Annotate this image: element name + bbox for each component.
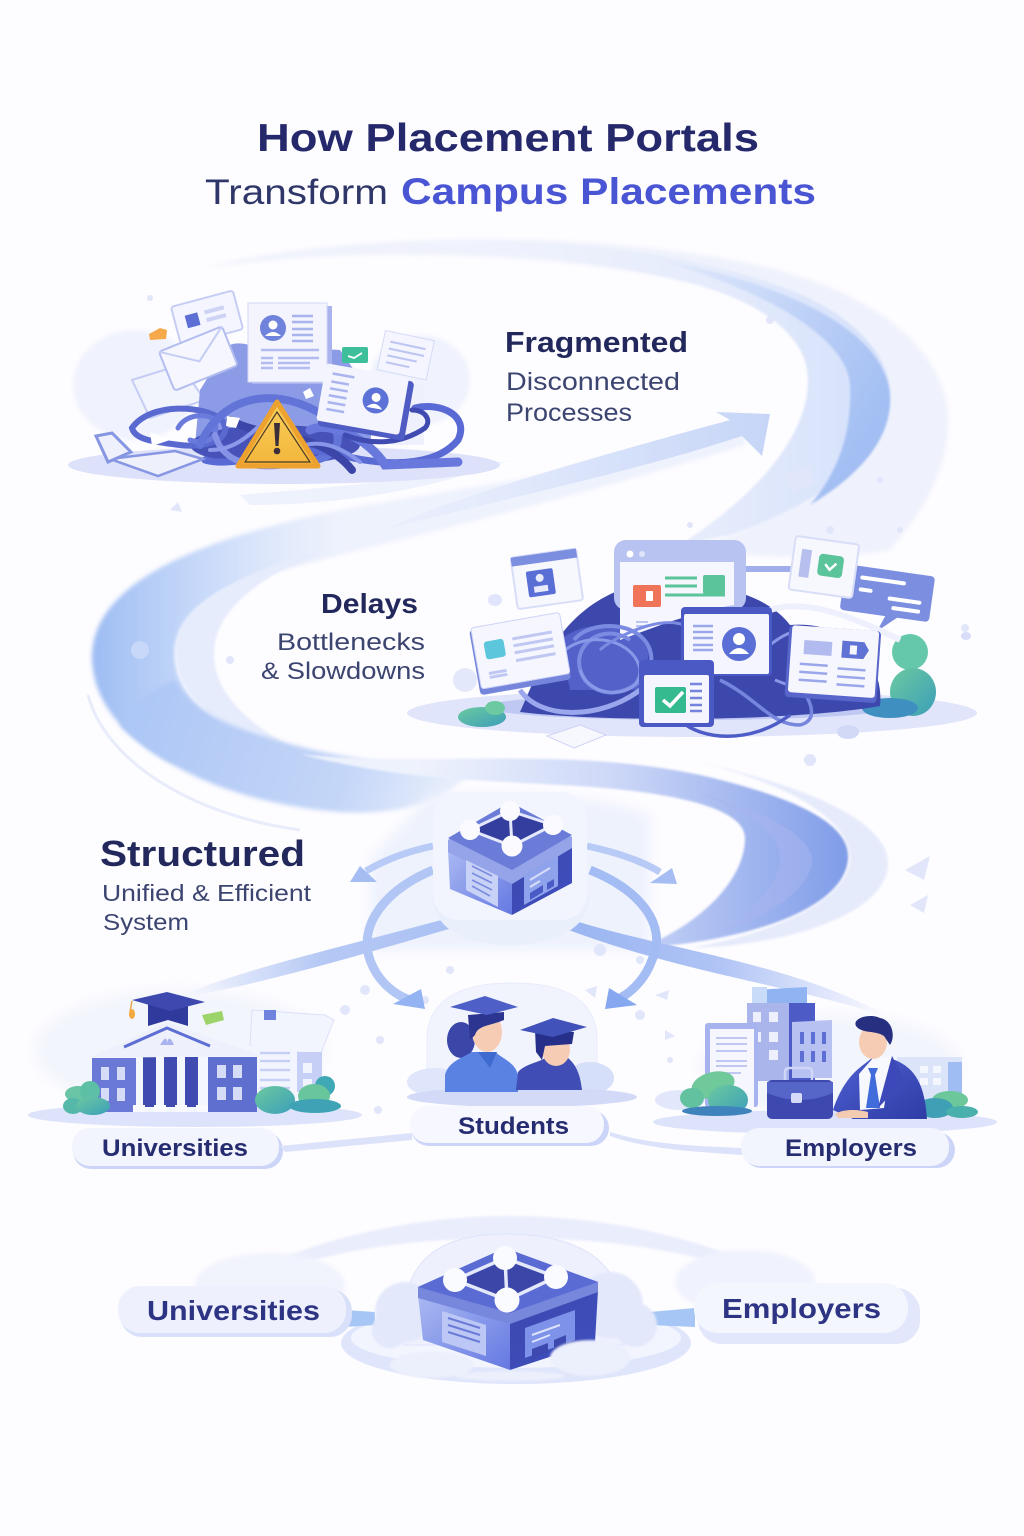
pill: universities	[118, 1286, 352, 1337]
dark pile	[520, 583, 880, 719]
platform	[341, 1302, 691, 1384]
student 2	[516, 1018, 587, 1090]
inbound band from universities	[170, 908, 483, 1000]
cloud left	[407, 1068, 463, 1096]
left paper	[132, 365, 205, 418]
glass panel	[433, 792, 587, 920]
arrow into upper right	[390, 412, 770, 528]
left windows	[101, 1067, 125, 1101]
pill: students: Students	[458, 1113, 569, 1140]
backdrop cloud	[35, 990, 325, 1110]
front clouds	[390, 1340, 630, 1381]
pill: universities: Universities	[147, 1295, 320, 1326]
right bushes	[255, 1076, 341, 1114]
top right card	[788, 536, 859, 598]
isometric box	[448, 801, 572, 915]
small paper	[547, 725, 606, 748]
right card with avatar	[315, 363, 415, 441]
bottom check card	[639, 660, 714, 727]
left cloud backdrop	[195, 1253, 345, 1317]
tangled cables	[132, 398, 461, 470]
right paper	[377, 330, 434, 380]
arrow left curve	[367, 870, 433, 1009]
left bushes	[63, 1081, 110, 1115]
arrow right curve	[590, 870, 657, 1009]
text: delays	[261, 588, 425, 685]
envelope	[159, 326, 238, 391]
description line 1: Bottlenecks	[277, 629, 425, 656]
right cloud backdrop	[675, 1250, 815, 1314]
graduation cap	[129, 992, 205, 1026]
ground	[407, 689, 977, 737]
orange tag	[149, 328, 167, 340]
connector: universities to students	[280, 1133, 412, 1152]
right card	[784, 625, 881, 703]
glass dome	[404, 1234, 624, 1345]
side wing	[295, 1052, 322, 1092]
main document	[248, 303, 332, 384]
backdrop cloud	[700, 1015, 960, 1115]
description line 1: Unified & Efficient	[102, 880, 312, 906]
pill: employers: Employers	[785, 1135, 917, 1162]
heading: Structured	[100, 833, 305, 874]
description line 2: & Slowdowns	[261, 658, 425, 685]
soft backdrop	[73, 330, 197, 440]
confetti particles	[124, 295, 969, 1114]
blue connectors	[345, 1308, 695, 1327]
heading: Fragmented	[505, 327, 688, 359]
scene: universities	[28, 990, 362, 1169]
right windows	[217, 1065, 242, 1100]
bottom hub section	[118, 1216, 920, 1384]
inbound band from employers	[543, 905, 895, 1020]
ribbon: top arc light inner band	[420, 241, 890, 545]
pile lighter patch	[560, 626, 650, 690]
ribbon: top arc pale outer band	[205, 239, 948, 557]
ground left blob	[655, 1090, 705, 1110]
cloud right	[566, 1062, 614, 1094]
colonnade	[133, 1057, 208, 1112]
pill: universities	[72, 1128, 283, 1169]
pill: universities: Universities	[102, 1135, 248, 1162]
side clouds	[372, 1272, 657, 1348]
ribbon: bottom-left band	[120, 680, 470, 813]
central hub	[432, 792, 590, 945]
arrow top right	[587, 846, 677, 884]
pediment	[88, 1022, 262, 1058]
document	[252, 1045, 297, 1105]
warning triangle	[238, 402, 318, 466]
student 1	[445, 996, 518, 1092]
lower right paper	[392, 385, 424, 445]
ground	[407, 1087, 637, 1107]
ribbon: left big band	[92, 432, 745, 762]
text: fragmented	[505, 327, 688, 427]
right plant	[862, 634, 936, 718]
title highlight: Campus Placements	[401, 171, 816, 212]
ribbon: top arc blue band	[650, 258, 890, 505]
scene: students	[407, 983, 637, 1146]
building right block	[208, 1057, 257, 1112]
top left card	[171, 290, 243, 346]
soft backdrop right	[370, 335, 470, 425]
pebbles	[837, 725, 859, 739]
left shard	[96, 433, 131, 462]
left bushes	[680, 1067, 752, 1116]
title line 1: How Placement Portals	[257, 117, 759, 160]
heading: Delays	[321, 588, 418, 619]
wing windows	[303, 1063, 312, 1088]
left plant	[458, 701, 506, 727]
ground	[28, 1103, 362, 1127]
description line 2: System	[103, 909, 189, 935]
speech bubble	[837, 564, 935, 638]
connector bars to the right	[746, 566, 796, 572]
green badge	[342, 347, 368, 363]
band tail under fragmented scene	[240, 460, 510, 505]
side building	[792, 1020, 832, 1078]
pill: employers	[694, 1283, 920, 1344]
ribbon: lower outer pale	[690, 762, 888, 948]
ground inner shadow	[485, 694, 895, 720]
hub arrows	[170, 846, 895, 1020]
ribbon: lower stripe	[700, 794, 812, 930]
pediment stroke	[124, 1028, 210, 1047]
back window	[614, 540, 746, 640]
connector: students to employers	[610, 1132, 742, 1155]
ground	[653, 1110, 997, 1134]
green card	[202, 1011, 224, 1025]
arrow top left	[350, 846, 433, 882]
check in badge	[348, 353, 362, 358]
building left block	[92, 1058, 136, 1112]
tangled cables	[520, 606, 900, 736]
pill: employers	[741, 1128, 955, 1168]
center card with avatar	[681, 607, 772, 676]
right building	[897, 1057, 962, 1102]
envelope	[250, 1010, 334, 1055]
glass bubble	[427, 983, 597, 1090]
title	[205, 117, 816, 212]
arch band	[205, 1216, 815, 1300]
description line 2: Processes	[506, 399, 632, 427]
left card	[469, 612, 571, 695]
pediment ornament	[160, 1038, 174, 1045]
hub shadow	[432, 895, 590, 945]
text: structured	[100, 833, 312, 935]
pile ground	[68, 446, 500, 484]
ribbon: thin edge line	[88, 695, 300, 830]
illustration: fragmented pile	[68, 290, 500, 484]
top left card	[511, 549, 583, 609]
flowing ribbon background	[88, 239, 948, 950]
briefcase	[767, 1068, 833, 1119]
description line 1: Disconnected	[506, 368, 680, 396]
pill: students	[410, 1106, 609, 1146]
ribbon: left inner pale band	[176, 548, 330, 752]
isometric box	[418, 1246, 598, 1370]
tablet on ground	[110, 451, 203, 476]
scene: employers	[653, 987, 997, 1168]
paper stack behind cables	[195, 343, 375, 445]
illustration: delays pile	[407, 536, 977, 748]
ribbon: lower sweep	[300, 754, 848, 948]
doc building	[705, 1023, 758, 1107]
title line 2: Transform	[205, 173, 388, 212]
man	[833, 1016, 927, 1119]
right bushes	[917, 1091, 978, 1118]
pale wash behind hub	[370, 793, 650, 950]
small white scraps	[226, 416, 240, 428]
pill: employers: Employers	[722, 1293, 881, 1324]
platform inner	[351, 1308, 681, 1368]
tower	[747, 987, 815, 1081]
